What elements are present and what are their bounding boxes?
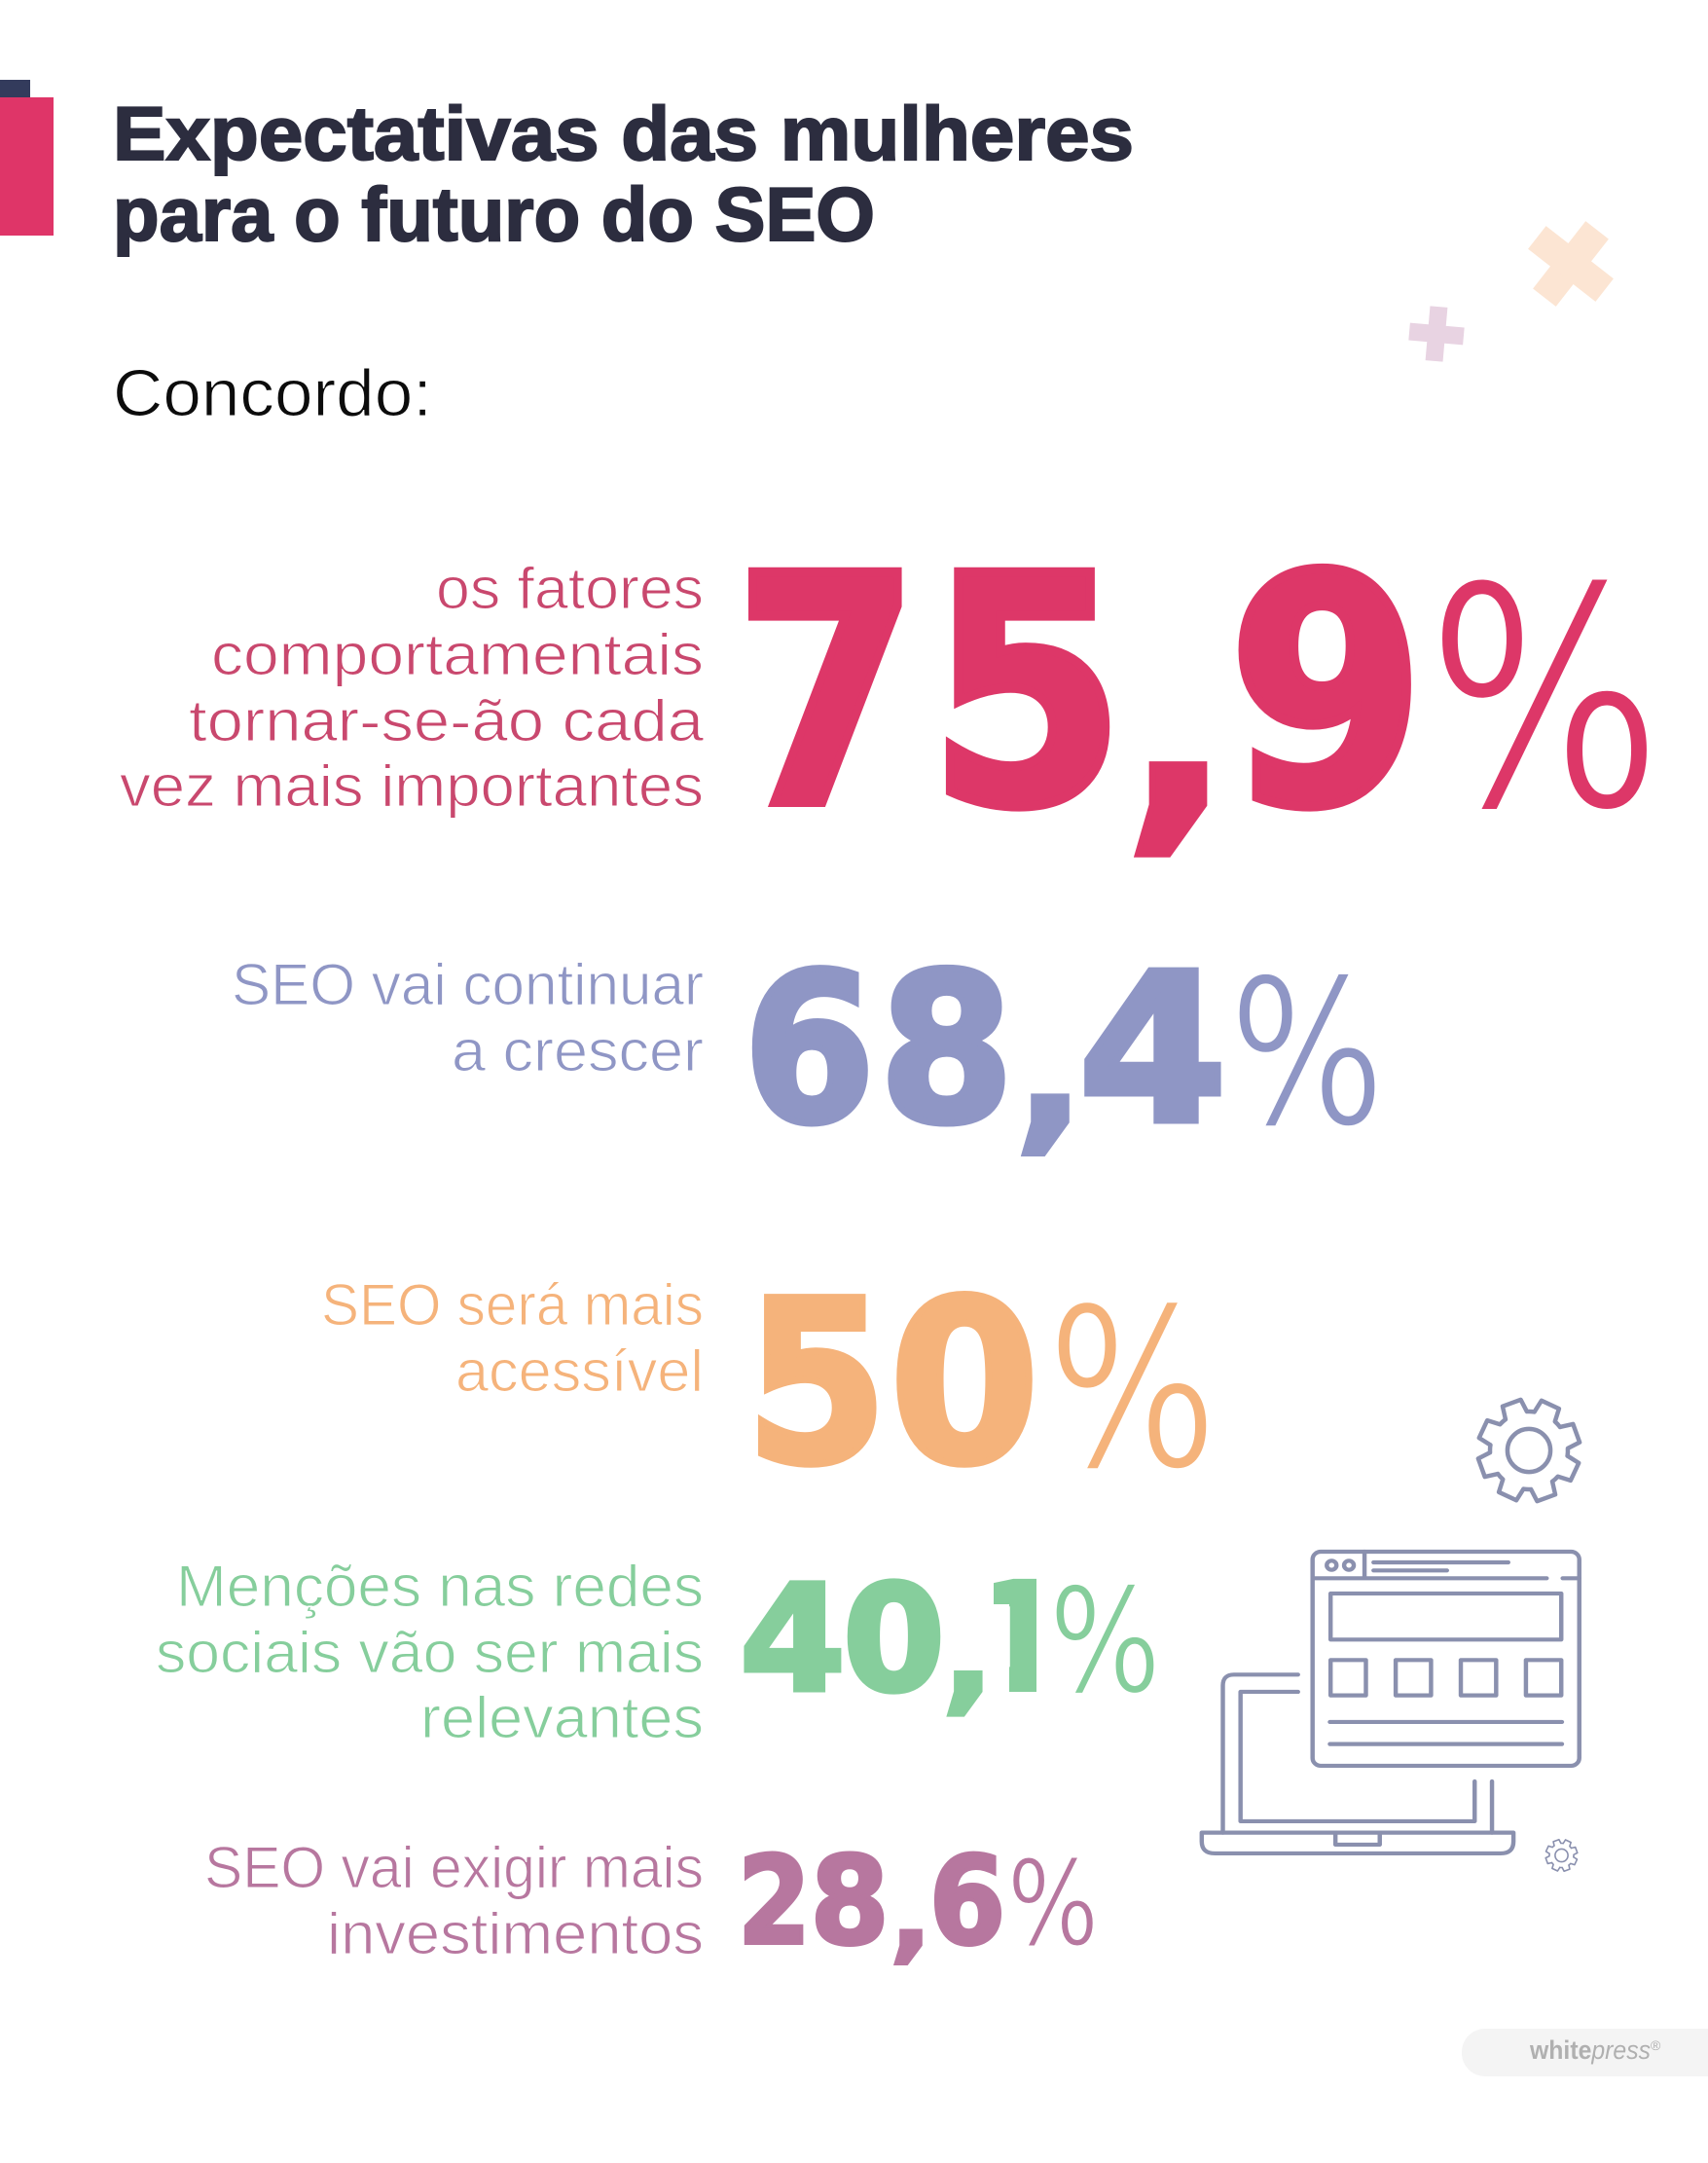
icon: large gear: [1475, 1397, 1582, 1504]
label: behavioral factors: tornar-se-ão cada: [189, 688, 705, 753]
decorative crosses: [1408, 221, 1614, 362]
stat: 50%: %: [1047, 1261, 1217, 1521]
stat: 75,9%: ,: [1122, 564, 1234, 881]
stat: 75,9%: 7: [735, 510, 919, 877]
label: SEO will keep growing: SEO vai continuar: [232, 952, 704, 1017]
stat: 50%: 5: [745, 1254, 888, 1515]
label: behavioral factors: [120, 556, 705, 819]
stat: 50%: [745, 1254, 1217, 1521]
stat: 75,9%: 5: [928, 510, 1125, 877]
title: Expectativas das mulheres: [113, 91, 1134, 176]
stat: 68,4%: ,: [1013, 965, 1087, 1172]
laptop: [1202, 1674, 1513, 1853]
label: SEO more accessible: acessível: [455, 1338, 704, 1404]
stat: 40,1%: 1: [972, 1554, 1074, 1725]
stat: 40,1%: ,: [941, 1575, 996, 1728]
label: more investment: investimentos: [327, 1901, 704, 1966]
logo: whitepress: [1462, 2029, 1708, 2076]
stat: 50%: 0: [890, 1254, 1039, 1515]
logo: whitepress: ®: [1651, 2037, 1661, 2053]
stat: 68,4%: [744, 930, 1385, 1173]
stat: 68,4%: %: [1229, 935, 1385, 1173]
subheading: Concordo: Concordo:: [113, 356, 432, 430]
stat: 28,6%: 8: [811, 1831, 890, 1972]
stat: 68,4%: 6: [744, 930, 875, 1169]
label: behavioral factors: vez mais importantes: [120, 753, 704, 819]
stat: 68,4%: 8: [880, 930, 1014, 1169]
stat: 28,6%: %: [1007, 1836, 1099, 1973]
stat: 75,9%: [735, 510, 1662, 881]
label: social mentions: [156, 1554, 704, 1750]
stat: 40,1%: 0: [843, 1554, 945, 1725]
title: para o futuro do SEO: [113, 171, 875, 257]
label: more investment: SEO vai exigir mais: [204, 1835, 704, 1900]
label: social mentions: sociais vão ser mais: [156, 1620, 704, 1685]
stat: 28,6%: 2: [738, 1831, 811, 1972]
stat: 40,1%: [744, 1578, 1154, 1717]
label: SEO more accessible: [321, 1272, 704, 1404]
browser window: [1313, 1552, 1580, 1766]
label: SEO will keep growing: a crescer: [452, 1018, 704, 1083]
label: SEO more accessible: SEO será mais: [321, 1272, 704, 1338]
label: social mentions: Menções nas redes: [176, 1554, 704, 1619]
stat: 40,1%: %: [1049, 1558, 1161, 1727]
stat: 28,6%: [738, 1831, 1099, 1975]
icon: small gear: [1544, 1839, 1579, 1872]
stat: 75,9%: 9: [1228, 510, 1425, 877]
label: social mentions: relevantes: [420, 1685, 704, 1750]
title: [113, 91, 1134, 257]
accent bars top left: [0, 80, 54, 236]
logo: whitepress: whitepress: [1529, 2035, 1651, 2065]
stat: 40,1%: 4: [740, 1554, 846, 1725]
label: behavioral factors: os fatores: [436, 556, 704, 621]
stat: 28,6%: ,: [889, 1854, 933, 1975]
label: SEO will keep growing: [232, 952, 704, 1083]
label: more investment: [204, 1835, 704, 1966]
label: behavioral factors: comportamentais: [211, 622, 704, 687]
icon: browser window and laptop: [1202, 1552, 1580, 1853]
stat: 68,4%: 4: [1078, 930, 1227, 1169]
stat: 28,6%: 6: [929, 1831, 1005, 1972]
